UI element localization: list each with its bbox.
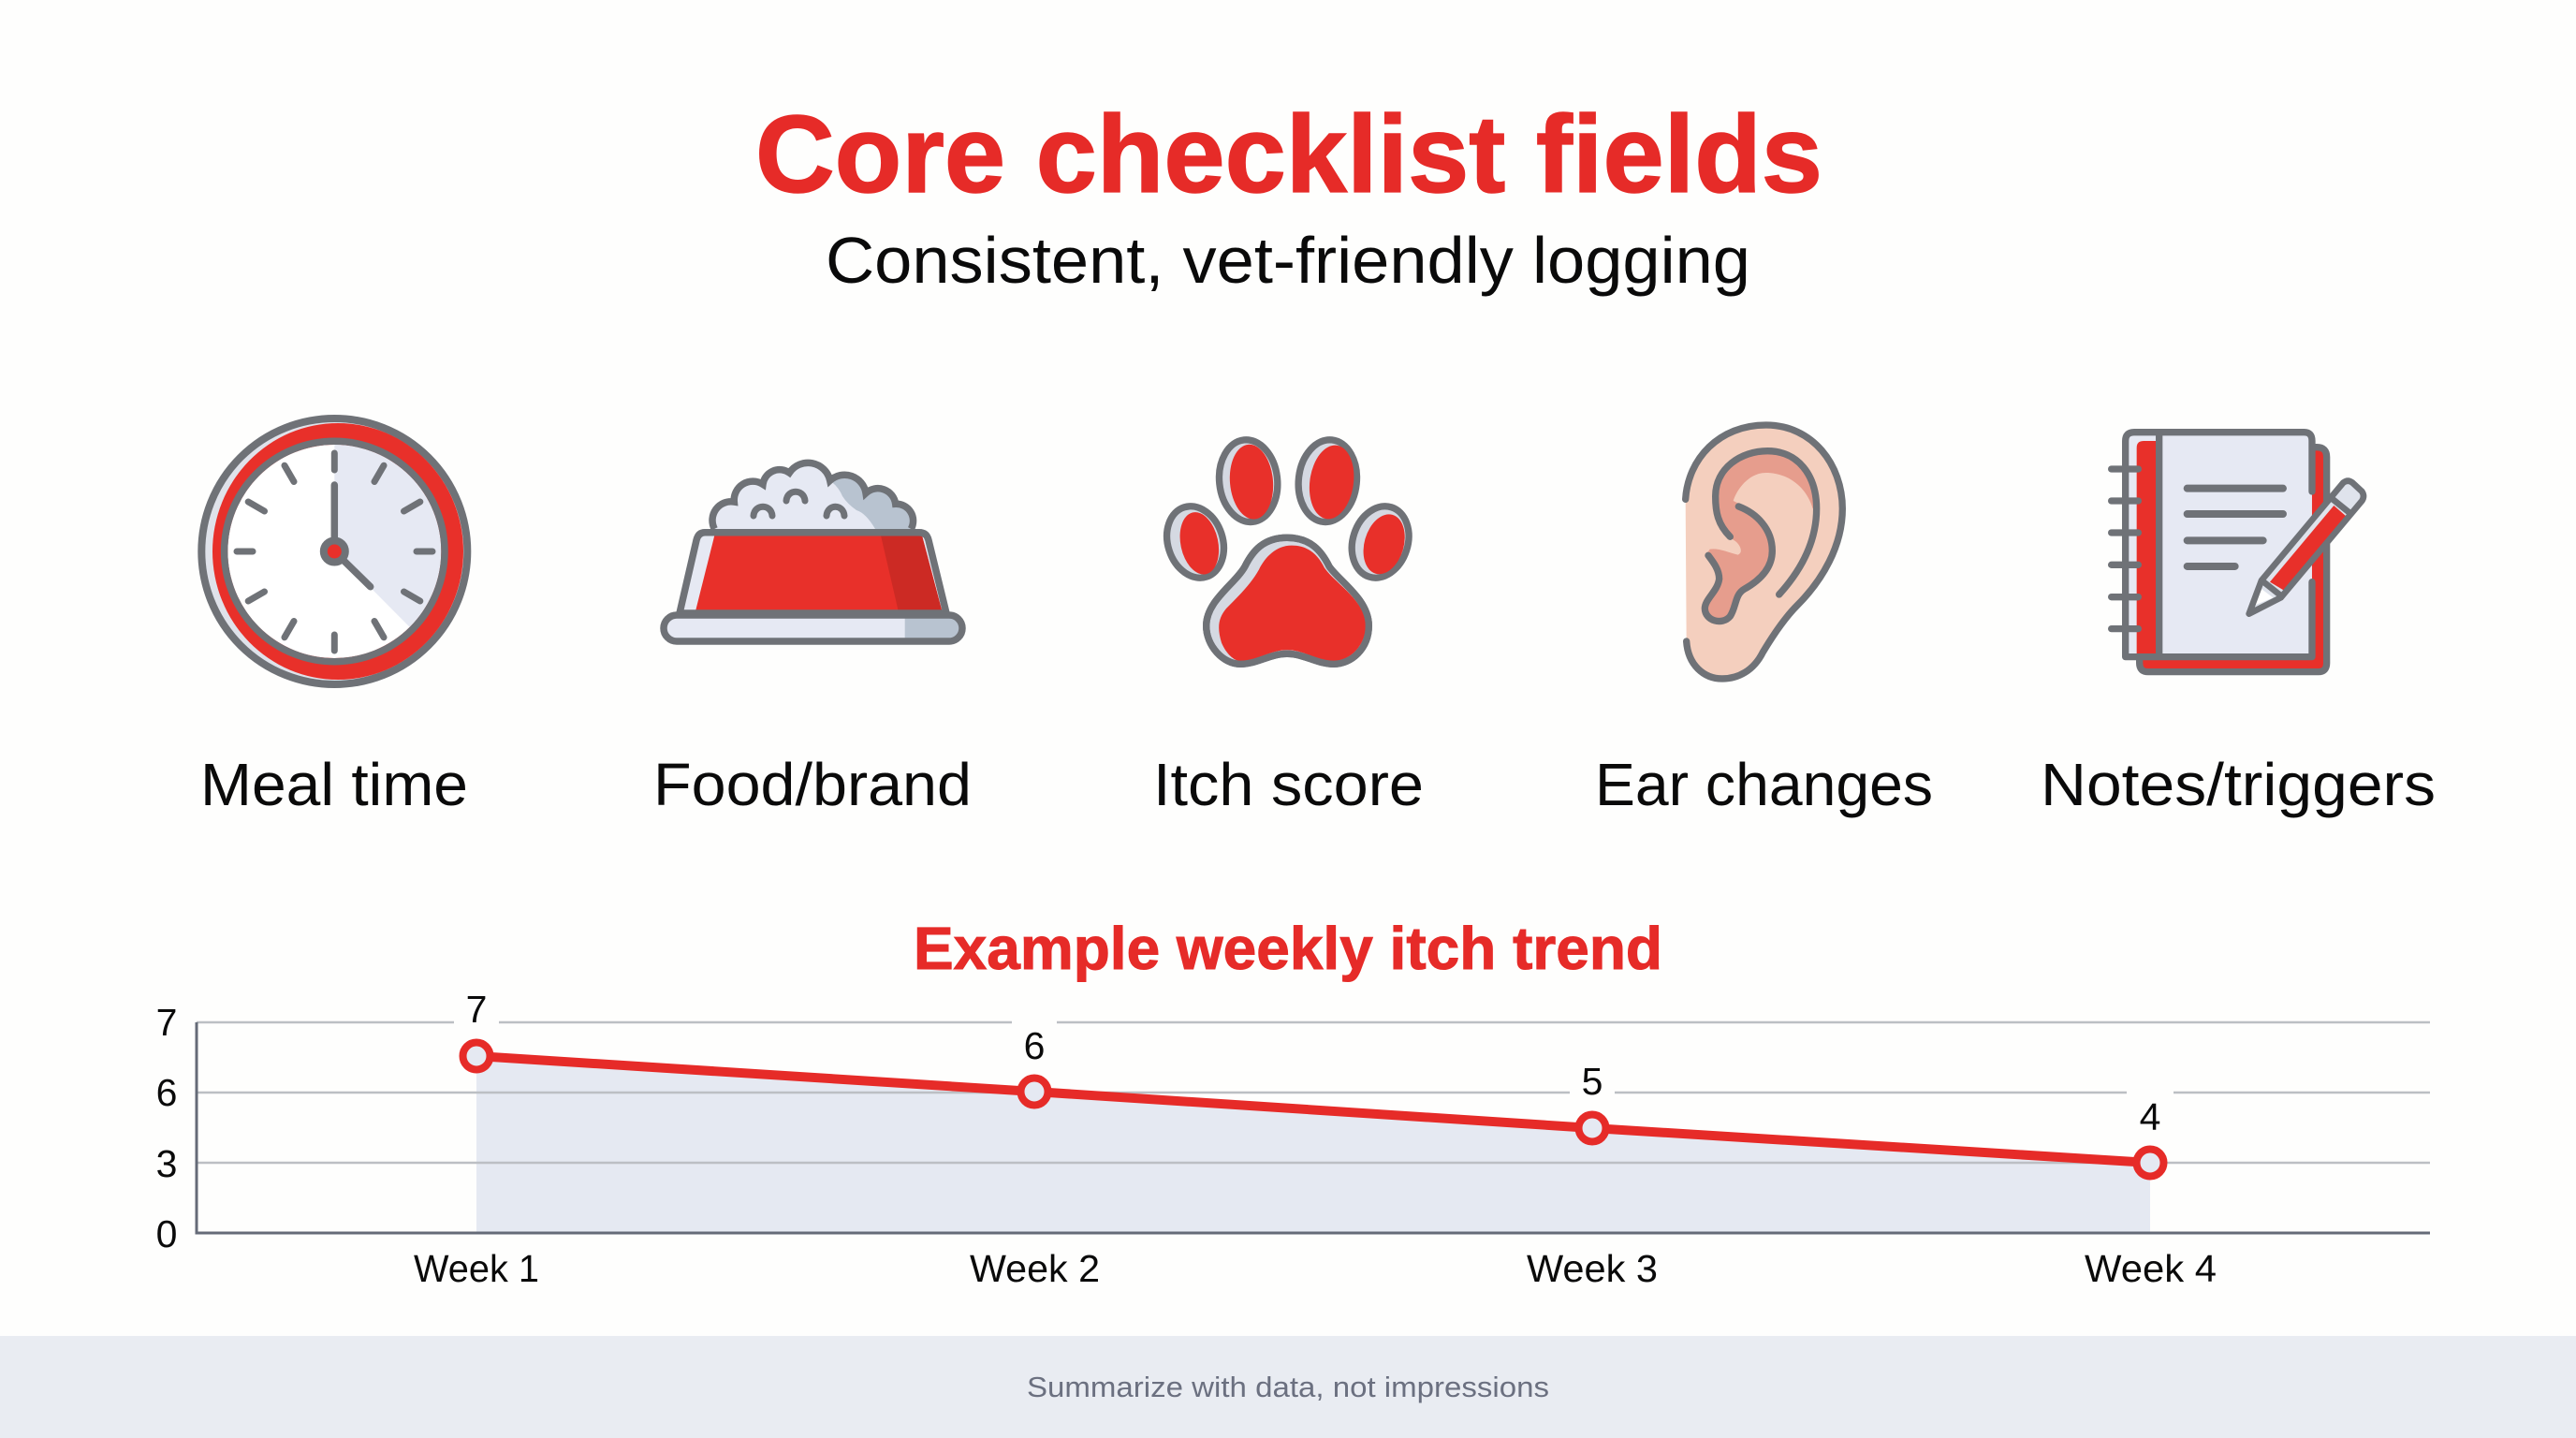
bowl body (680, 533, 946, 613)
page lines (2188, 489, 2283, 566)
icon: food bowl (664, 462, 962, 641)
footer text: Summarize with data, not impressions (1027, 1371, 1549, 1403)
x axis labels: Week 1 (414, 1247, 539, 1290)
y axis labels (156, 1001, 177, 1255)
icon: notebook with pencil (2112, 433, 2364, 672)
bowl base (664, 615, 962, 641)
chart heading: Example weekly itch trend (914, 915, 1662, 982)
label: meal time: Meal time (200, 751, 468, 818)
icon: paw (1158, 437, 1418, 664)
y axis labels: 3 (156, 1142, 177, 1185)
label: itch score: Itch score (1153, 751, 1424, 818)
label: ear changes: Ear changes (1595, 751, 1933, 818)
pencil (2249, 481, 2364, 614)
x axis labels: Week 2 (970, 1247, 1100, 1290)
value labels: 6 (1024, 1024, 1045, 1067)
back cover (2140, 448, 2327, 672)
main pad (1207, 537, 1368, 664)
x axis labels (414, 1247, 2217, 1290)
subtitle: Consistent, vet-friendly logging (826, 224, 1750, 297)
icon: ear (1686, 425, 1842, 679)
toe pads (1158, 437, 1418, 585)
icon: clock (201, 418, 467, 684)
y axis labels: 6 (156, 1071, 177, 1114)
value labels (454, 988, 2174, 1138)
y axis labels: 0 (156, 1212, 177, 1255)
area fill (476, 1056, 2150, 1233)
footer band (0, 1336, 2576, 1438)
kibble pile (712, 462, 914, 529)
front cover and page (2126, 433, 2312, 657)
label: food/brand: Food/brand (653, 751, 972, 818)
value labels: 7 (466, 988, 487, 1031)
title: Core checklist fields (755, 93, 1822, 215)
x axis labels: Week 4 (2085, 1247, 2217, 1290)
label: notes/triggers: Notes/triggers (2041, 751, 2436, 818)
value labels: 5 (1582, 1060, 1603, 1103)
x axis labels: Week 3 (1527, 1247, 1658, 1290)
spiral rings (2112, 469, 2138, 629)
axes (197, 1022, 2430, 1233)
line chart: weekly itch trend (156, 988, 2430, 1290)
y axis labels: 7 (156, 1001, 177, 1044)
value labels: 4 (2140, 1095, 2160, 1138)
data markers (462, 1043, 2164, 1176)
trend line (476, 1056, 2150, 1163)
